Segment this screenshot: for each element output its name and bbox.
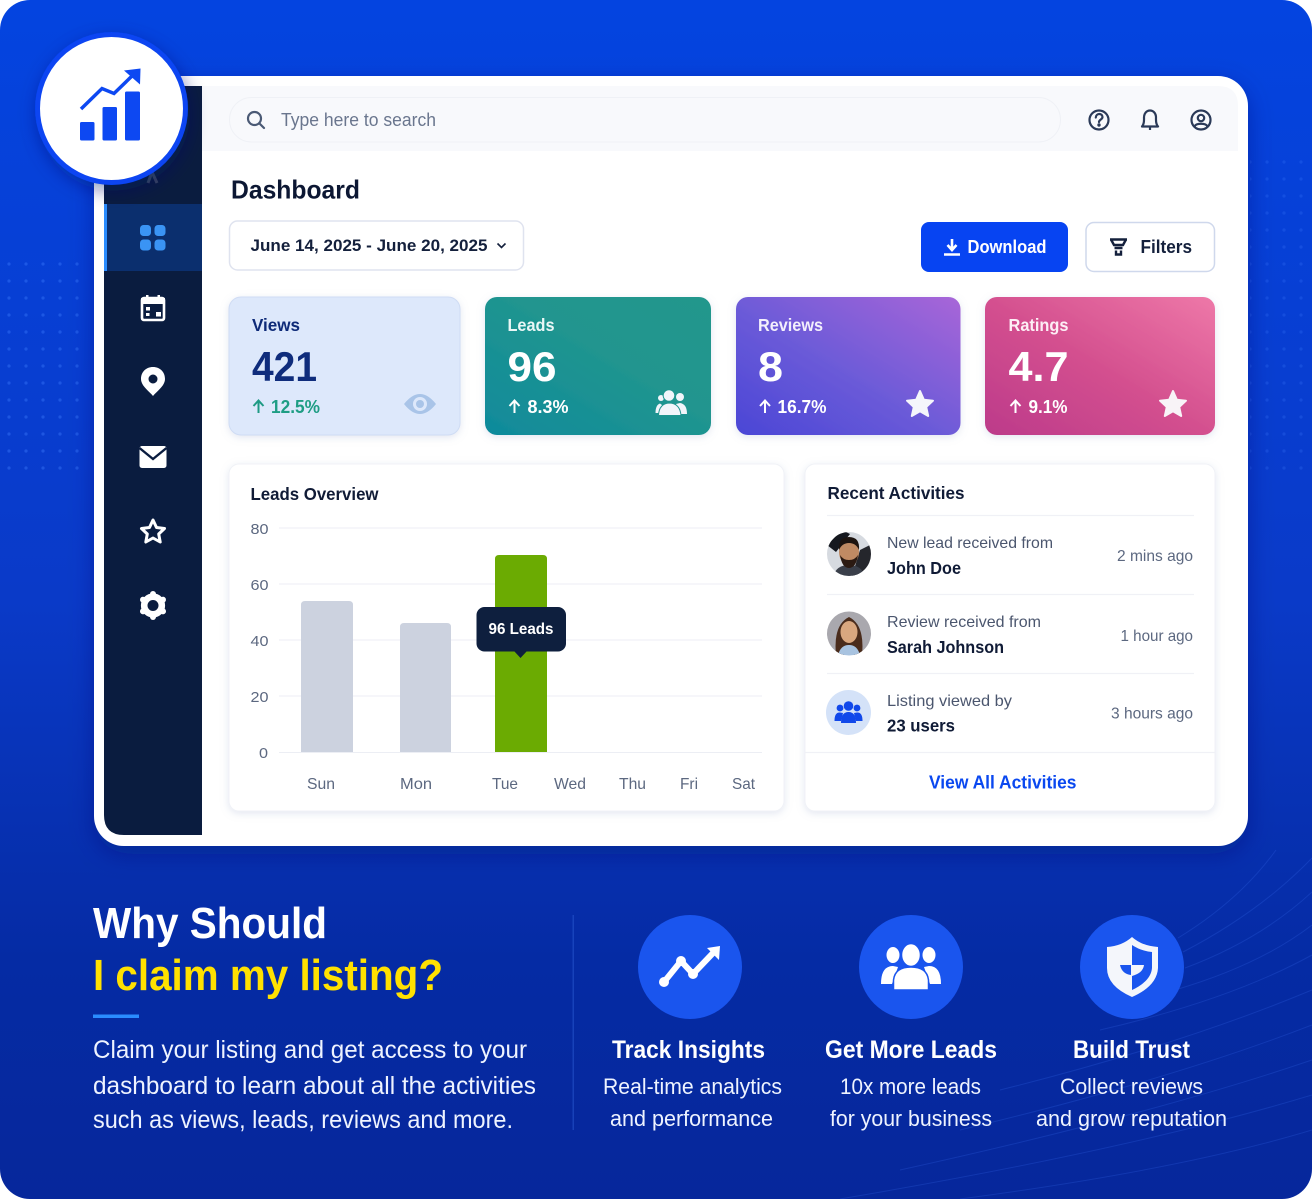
icon: eye <box>404 394 436 414</box>
card: Views: 421 <box>252 343 317 390</box>
heading: Dashboard: Dashboard <box>231 174 360 204</box>
date range picker: June 14, 2025 - June 20, 2025 <box>250 236 488 255</box>
dot pattern right <box>1250 160 1312 470</box>
search placeholder: Type here to search <box>281 110 436 130</box>
description text: dashboard to learn about all the activities <box>93 1072 536 1100</box>
x axis labels: Fri <box>680 776 698 793</box>
benefit: build trust: and grow reputation <box>1036 1106 1227 1131</box>
activity: Sarah Johnson: Sarah Johnson <box>887 637 1004 657</box>
icon: map pin <box>141 367 165 396</box>
y axis labels <box>250 521 268 762</box>
activity: 23 users <box>826 690 1193 736</box>
icon: grid <box>140 225 166 250</box>
x axis labels: Tue <box>492 776 518 793</box>
x axis labels: Mon <box>400 776 432 793</box>
y axis labels: 60 <box>250 577 268 594</box>
icon: calendar <box>141 295 165 320</box>
trend up arrow <box>760 400 770 413</box>
card: Reviews <box>736 297 960 435</box>
benefit: get more leads <box>825 915 997 1131</box>
activity: John Doe: New lead received from <box>887 535 1053 552</box>
search box <box>230 98 1060 142</box>
filters button: Filters <box>1140 237 1192 257</box>
benefit: build trust: Build Trust <box>1073 1036 1191 1064</box>
heading: why should I claim my listing: Why Should <box>93 899 327 948</box>
benefit: track insights: Track Insights <box>612 1036 765 1064</box>
activity: John Doe: John Doe <box>887 558 961 578</box>
link: view all activities: View All Activities <box>929 772 1076 792</box>
icon: user <box>1192 110 1210 130</box>
x axis labels <box>307 776 756 793</box>
tooltip <box>476 607 566 658</box>
panel heading: Recent Activities <box>828 483 965 503</box>
icon: help <box>1090 110 1108 130</box>
accent underline <box>93 1014 139 1018</box>
description text <box>93 1036 536 1134</box>
icon: star <box>1160 391 1186 416</box>
icon: people <box>656 390 687 416</box>
icon: download <box>944 239 960 254</box>
activity: John Doe <box>827 530 1193 578</box>
icon: filter <box>1110 240 1127 254</box>
activity: John Doe: 2 mins ago <box>1117 548 1193 565</box>
benefit: build trust: Collect reviews <box>1060 1074 1203 1099</box>
trend up arrow <box>510 400 520 413</box>
card: Leads: 8.3% <box>528 397 568 417</box>
icon: magnifier <box>248 112 264 128</box>
card: Leads: 96 <box>508 343 556 390</box>
activity: Sarah Johnson <box>827 611 1193 657</box>
trend up arrow <box>1010 400 1020 413</box>
activity: 23 users: 23 users <box>887 716 955 736</box>
activity: 23 users: 3 hours ago <box>1111 706 1193 722</box>
benefit: build trust <box>1036 915 1227 1131</box>
description text: such as views, leads, reviews and more. <box>93 1106 513 1134</box>
y axis labels: 20 <box>250 689 268 706</box>
vertical divider <box>572 915 574 1130</box>
download button: Download <box>968 237 1046 257</box>
card: Ratings: 9.1% <box>1028 397 1068 417</box>
date range picker <box>230 221 524 270</box>
benefit: get more leads: 10x more leads <box>840 1074 981 1099</box>
y axis labels: 80 <box>250 521 268 538</box>
heading: why should I claim my listing: I claim my listing? <box>93 951 443 1000</box>
card: Views <box>229 297 460 435</box>
benefit: get more leads: Get More Leads <box>825 1036 997 1064</box>
heading: why should I claim my listing <box>93 899 443 1000</box>
card: Reviews: Reviews <box>758 315 823 335</box>
card: Views: 12.5% <box>271 397 320 417</box>
icon: gear <box>143 594 163 617</box>
y axis labels: 0 <box>259 745 268 762</box>
benefit: track insights <box>603 915 782 1131</box>
card: Leads: Leads <box>508 315 555 335</box>
x axis labels: Sat <box>732 776 756 793</box>
card: Reviews: 16.7% <box>778 397 826 417</box>
icon: shield <box>1080 915 1184 1019</box>
benefit: track insights: and performance <box>610 1106 773 1131</box>
icon: growth chart <box>80 68 140 140</box>
icon: bell <box>1142 110 1158 130</box>
chart title: Leads Overview <box>250 484 379 504</box>
description text: Claim your listing and get access to your <box>93 1036 527 1064</box>
avatar: woman <box>827 611 871 656</box>
download button <box>921 222 1068 272</box>
icon: people <box>859 915 963 1019</box>
bars <box>301 555 547 752</box>
icon: star <box>142 520 164 542</box>
card: Leads <box>485 297 711 435</box>
tooltip: 96 Leads <box>488 621 554 638</box>
card: Views: Views <box>252 315 300 335</box>
active nav item <box>104 204 202 271</box>
faded logo letter <box>148 172 157 183</box>
dashboard window <box>94 76 1248 846</box>
x axis labels: Wed <box>554 776 586 793</box>
icon: trend line <box>638 915 742 1019</box>
sidebar <box>104 86 202 835</box>
top bar <box>202 86 1238 151</box>
activity: Sarah Johnson: Review received from <box>887 614 1041 631</box>
logo badge <box>38 34 186 182</box>
activity: 23 users: Listing viewed by <box>887 693 1012 710</box>
benefit: track insights: Real-time analytics <box>603 1074 782 1099</box>
filters button <box>1086 222 1214 272</box>
card: Ratings <box>985 297 1215 435</box>
icon: star <box>907 391 933 416</box>
card: Ratings: Ratings <box>1008 315 1069 335</box>
y axis labels: 40 <box>250 633 268 650</box>
x axis labels: Sun <box>307 776 335 793</box>
dot pattern left <box>0 255 92 475</box>
trend up arrow <box>254 400 264 413</box>
avatar: man <box>827 530 872 577</box>
card: Reviews: 8 <box>758 343 783 390</box>
icon: envelope <box>140 446 166 468</box>
panel: recent activities <box>805 464 1215 811</box>
avatar: users icon <box>826 690 871 735</box>
curved background lines <box>840 850 1312 1199</box>
x axis labels: Thu <box>619 776 646 793</box>
card: Ratings: 4.7 <box>1008 343 1068 390</box>
activity: Sarah Johnson: 1 hour ago <box>1120 628 1193 645</box>
benefit: get more leads: for your business <box>830 1106 992 1131</box>
panel: leads overview chart <box>229 464 784 811</box>
